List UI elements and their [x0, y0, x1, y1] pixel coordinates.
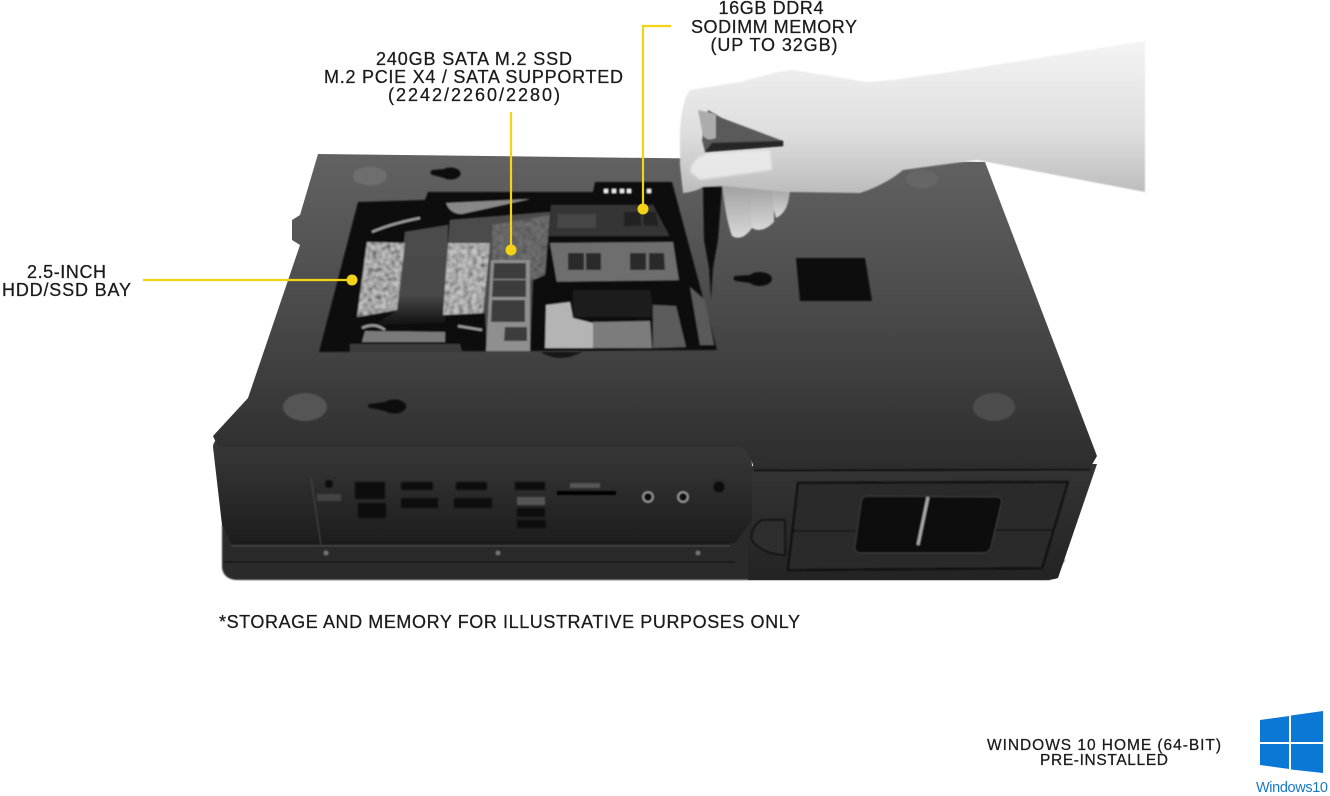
screwdriver [703, 187, 722, 300]
motherboard section [443, 212, 550, 352]
D-shaped latch [752, 520, 785, 555]
curled fingers [722, 185, 790, 238]
callout text: 2.5-INCH [27, 262, 106, 282]
rear IO ports [311, 478, 726, 556]
operating system note: PRE-INSTALLED [1040, 752, 1168, 769]
open memory and storage compartment [319, 182, 717, 358]
DC power jack [325, 480, 333, 488]
rubber foot bottom left [283, 393, 327, 421]
computer case [213, 154, 1097, 580]
brackets [362, 218, 482, 330]
SSD chips [491, 263, 527, 341]
leader dot [506, 244, 516, 256]
left front panel [213, 437, 752, 543]
thumb highlight [690, 150, 772, 180]
HDMI ports [401, 482, 487, 490]
square vent opening [796, 258, 872, 301]
SD card slot [557, 491, 616, 495]
audio jack headphones [643, 492, 653, 502]
arm and hand [680, 41, 1145, 193]
case top surface [213, 154, 1097, 470]
audio jack microphone [678, 492, 688, 502]
door seam [793, 530, 1054, 531]
SD label [570, 483, 600, 488]
gap between thumb and index finger [702, 110, 783, 152]
upper memory module [548, 205, 670, 238]
callout text: 240GB SATA M.2 SSD [376, 49, 572, 69]
leader dot [346, 274, 358, 286]
notch below cavity [540, 352, 582, 358]
base detail lines [224, 543, 735, 562]
power button [712, 480, 726, 494]
keyhole mount bottom left [368, 399, 406, 414]
operating system note: WINDOWS 10 HOME (64-BIT) [987, 737, 1221, 754]
fingertip on driver [698, 110, 716, 140]
logo wordmark: Windows10 [1256, 780, 1328, 796]
cooling assembly [534, 280, 714, 350]
callout text: HDD/SSD BAY [2, 280, 131, 300]
callout: M.2 SSD [324, 49, 623, 256]
keyhole mount top [430, 167, 461, 180]
front lip highlight [216, 446, 742, 448]
M.2 SSD [486, 260, 530, 351]
drive bay film [375, 225, 448, 325]
LAN ports [355, 482, 386, 518]
drive connector [362, 331, 445, 342]
callout: memory [638, 0, 857, 214]
callout text: (2242/2260/2280) [388, 85, 560, 105]
callout text: SODIMM MEMORY [691, 17, 857, 37]
front drive bay [752, 482, 1068, 570]
power label [317, 494, 341, 501]
leader line [510, 112, 512, 250]
bay door outline [788, 482, 1068, 570]
leader dot [638, 204, 648, 214]
lower memory module [548, 236, 679, 283]
hand holding screwdriver [680, 41, 1145, 300]
ribbon cable highlight [446, 199, 530, 214]
drive circuit board [357, 242, 405, 317]
right front face [748, 464, 1097, 580]
base lip [222, 525, 1065, 580]
DisplayPort ports [401, 498, 492, 508]
door latch sliver [918, 497, 928, 545]
USB ports [515, 482, 546, 528]
leader line [143, 279, 352, 281]
rubber foot top left [353, 166, 387, 186]
callout: HDD/SSD bay [2, 262, 358, 300]
footnote: *STORAGE AND MEMORY FOR ILLUSTRATIVE PURPOSES ONLY [219, 612, 800, 632]
rubber foot bottom right [973, 393, 1015, 421]
cavity opening [319, 182, 717, 352]
IO panel outline [311, 478, 321, 545]
logo panes [1260, 711, 1323, 773]
icon: Windows logo [1256, 711, 1328, 796]
case screws [324, 550, 700, 556]
dark shadow in finger gap [705, 141, 783, 152]
leader line [643, 26, 671, 209]
callout text: M.2 PCIE X4 / SATA SUPPORTED [324, 67, 623, 87]
keyhole mount right [734, 272, 772, 286]
rubber foot top right [906, 170, 938, 188]
connector contacts [604, 189, 651, 193]
callout text: (UP TO 32GB) [710, 35, 838, 55]
door opening [855, 496, 1002, 553]
